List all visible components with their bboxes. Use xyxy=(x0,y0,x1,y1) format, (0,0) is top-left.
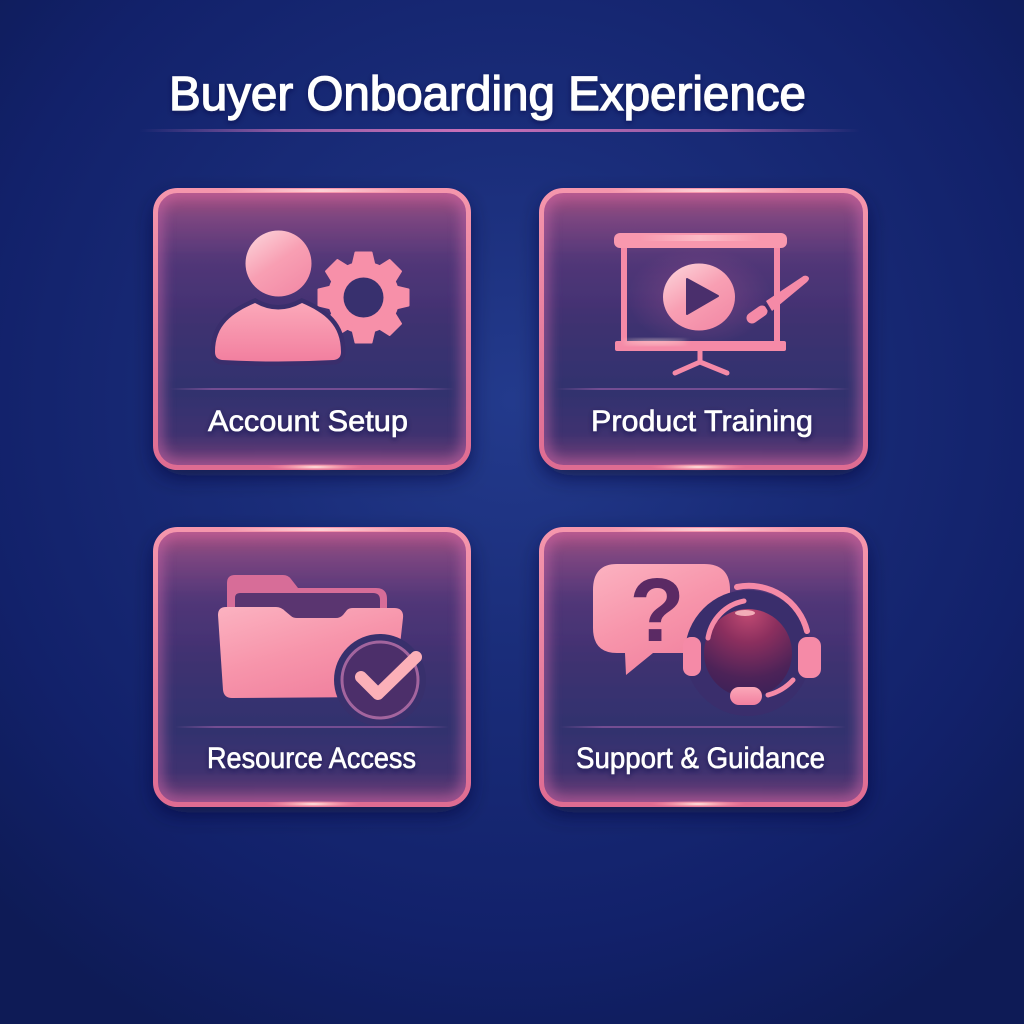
title underline xyxy=(140,129,860,132)
title: Buyer Onboarding Experience xyxy=(169,68,806,121)
label: resource access: Resource Access xyxy=(207,742,416,775)
icon: presentation screen xyxy=(614,233,809,373)
panel: support and guidance xyxy=(542,528,866,808)
label: product training: Product Training xyxy=(591,405,813,438)
label: support and guidance: Support & Guidance xyxy=(576,742,825,775)
panel: product training xyxy=(542,189,866,470)
question mark: ? xyxy=(630,561,684,661)
icon: speech bubble and headset xyxy=(593,561,821,716)
icon: folder with checkmark xyxy=(218,575,426,726)
panel: resource access xyxy=(156,528,468,808)
label: account setup: Account Setup xyxy=(208,405,408,438)
icon: user with gear xyxy=(215,230,408,362)
panel: account setup xyxy=(156,189,468,470)
